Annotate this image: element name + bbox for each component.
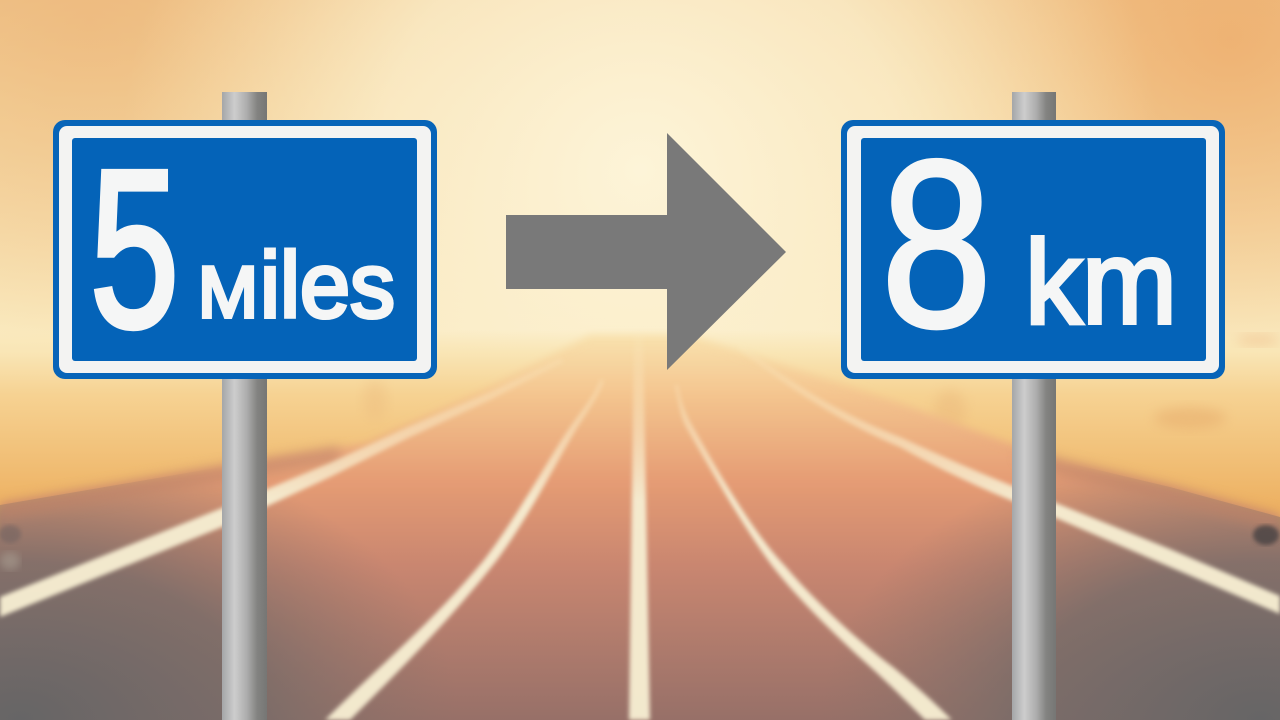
left sign post [222,92,267,720]
right sign: 8 km [841,112,1225,379]
arrow [506,133,786,370]
lane line: centre [629,335,650,720]
left sign: 5 miles [53,120,437,379]
unit: km: km [1025,216,1177,349]
right sign post [1012,92,1056,720]
background: blurred ground on both sides [0,330,1280,550]
background: road surface [0,335,1280,720]
unit: miles: M [198,253,258,333]
unit: miles [198,233,395,337]
value: 8: 8 [881,112,992,377]
unit: miles: iles [260,233,395,337]
road lane markings [0,335,1280,720]
value: 5: 5 [90,124,179,374]
lane line: outer right [738,346,1280,614]
lane line: inner left [325,380,604,720]
lane line: outer left [0,358,564,617]
lane line: inner right [675,385,952,720]
